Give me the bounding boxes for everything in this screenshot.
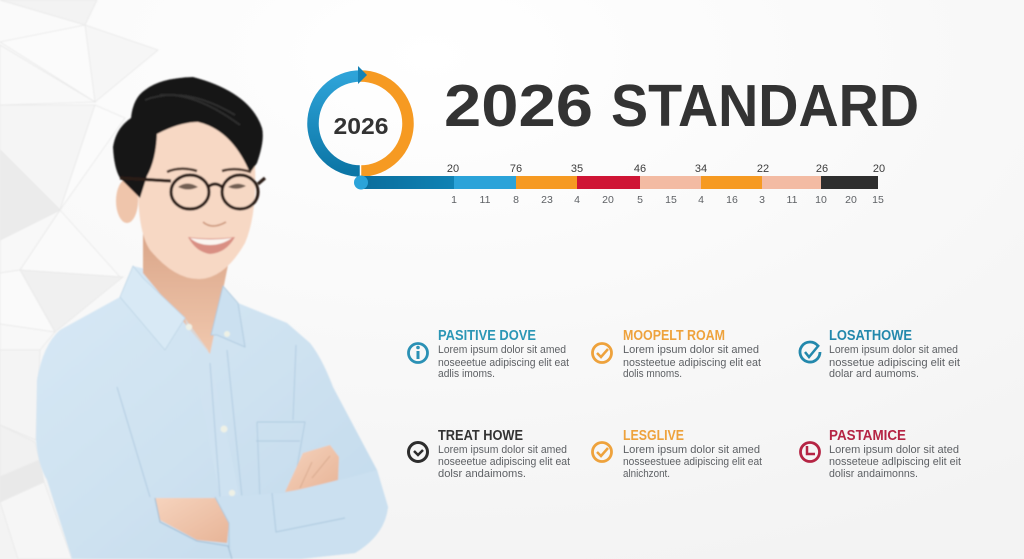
year ring	[313, 66, 408, 178]
timeline bottom labels: 4	[574, 194, 580, 206]
head	[113, 77, 265, 279]
ring arrow	[358, 66, 367, 84]
body text: nosseteue adlpiscing elit eit	[829, 456, 962, 468]
neck	[143, 225, 232, 354]
shirt collar	[120, 266, 185, 350]
timeline bottom labels: 3	[759, 194, 765, 206]
timeline top labels: 76	[510, 163, 522, 175]
icon: blue check	[800, 342, 820, 362]
nose	[203, 222, 226, 226]
heading: LESGLIVE	[623, 428, 684, 444]
eyes	[178, 184, 246, 190]
body text: dolisr andaimonns.	[829, 468, 918, 480]
timeline top labels: 20	[873, 163, 885, 175]
timeline bottom labels: 23	[541, 194, 553, 206]
timeline bottom labels	[451, 194, 884, 206]
heading: PASITIVE DOVE	[438, 328, 536, 344]
timeline top labels: 46	[634, 163, 646, 175]
panel: losa thowe	[800, 328, 961, 380]
face	[138, 118, 255, 279]
eyebrows	[167, 169, 251, 172]
timeline bottom labels: 10	[815, 194, 827, 206]
shirt placket and pocket	[117, 345, 305, 500]
person portrait	[36, 77, 388, 559]
timeline bottom labels: 20	[602, 194, 614, 206]
panel: pastamice	[800, 428, 962, 480]
glasses	[120, 175, 265, 209]
body text: noseeetue adipiscing elit eat	[438, 357, 570, 369]
title: 2026	[444, 73, 593, 139]
heading: TREAT HOWE	[438, 428, 523, 444]
title: STANDARD	[611, 73, 919, 139]
heading: LOSATHOWE	[829, 328, 912, 344]
body text: Lorem ipsum dolor sit amed	[623, 444, 760, 456]
timeline top labels: 34	[695, 163, 707, 175]
body text: dolsr andaimoms.	[438, 468, 526, 480]
icon: orange check	[592, 344, 612, 362]
timeline bottom labels: 11	[787, 194, 798, 206]
heading: PASTAMICE	[829, 428, 906, 444]
body text: adlis imoms.	[438, 368, 495, 380]
shirt body	[36, 266, 388, 559]
body text: nossetue adipiscing elit eit	[829, 357, 961, 369]
body text: alnichzont.	[623, 468, 670, 480]
body text: Lorem ipsum dolor sit amed	[623, 344, 759, 356]
body text: dolar ard aumoms.	[829, 368, 919, 380]
body text: nossteetue adipiscing elit eat	[623, 357, 762, 369]
timeline bottom labels: 20	[845, 194, 857, 206]
panel: moopelt roam	[592, 328, 762, 380]
timeline bottom labels: 8	[513, 194, 519, 206]
timeline bottom labels: 15	[665, 194, 677, 206]
hand	[285, 445, 339, 492]
timeline bottom labels: 5	[637, 194, 643, 206]
timeline bottom labels: 11	[480, 194, 491, 206]
icon: dark clock check	[408, 442, 428, 462]
body text: Lorem ipsum dolor sit amed	[829, 344, 958, 356]
body text: nosseestuee adipiscing elit eat	[623, 456, 763, 468]
timeline top labels: 20	[447, 163, 459, 175]
mouth	[188, 237, 235, 254]
heading: MOOPELT ROAM	[623, 328, 725, 344]
icon: orange check	[592, 442, 612, 462]
icon: red clock	[800, 442, 820, 462]
decorative polygon pattern	[0, 0, 158, 559]
shirt buttons	[186, 324, 304, 559]
body text: Lorem ipsum dolor sit ated	[829, 444, 959, 456]
panel: positive dove	[408, 328, 570, 380]
timeline top labels	[447, 163, 885, 175]
ear	[116, 179, 138, 223]
body text: dolis mnoms.	[623, 368, 682, 380]
timeline bottom labels: 1	[451, 194, 457, 206]
body text: Lorem ipsum dolor sit amed	[438, 344, 566, 356]
forearm	[155, 498, 229, 543]
timeline top labels: 26	[816, 163, 828, 175]
timeline top labels: 35	[571, 163, 583, 175]
title	[444, 73, 919, 139]
timeline bottom labels: 4	[698, 194, 704, 206]
folded sleeve	[215, 470, 388, 559]
timeline bottom labels: 15	[872, 194, 884, 206]
timeline start dot	[354, 176, 368, 190]
timeline bottom labels: 16	[726, 194, 738, 206]
icon: info	[408, 344, 428, 362]
timeline bar	[354, 176, 878, 190]
body text: Lorem ipsum dolor sit amed	[438, 444, 567, 456]
timeline top labels: 22	[757, 163, 769, 175]
panel: lesglive	[592, 428, 763, 480]
body text: noseeetue adipiscing elit eat	[438, 456, 571, 468]
hair	[113, 77, 263, 198]
ring year label: 2026	[334, 113, 388, 139]
panel: treat howe	[408, 428, 571, 480]
